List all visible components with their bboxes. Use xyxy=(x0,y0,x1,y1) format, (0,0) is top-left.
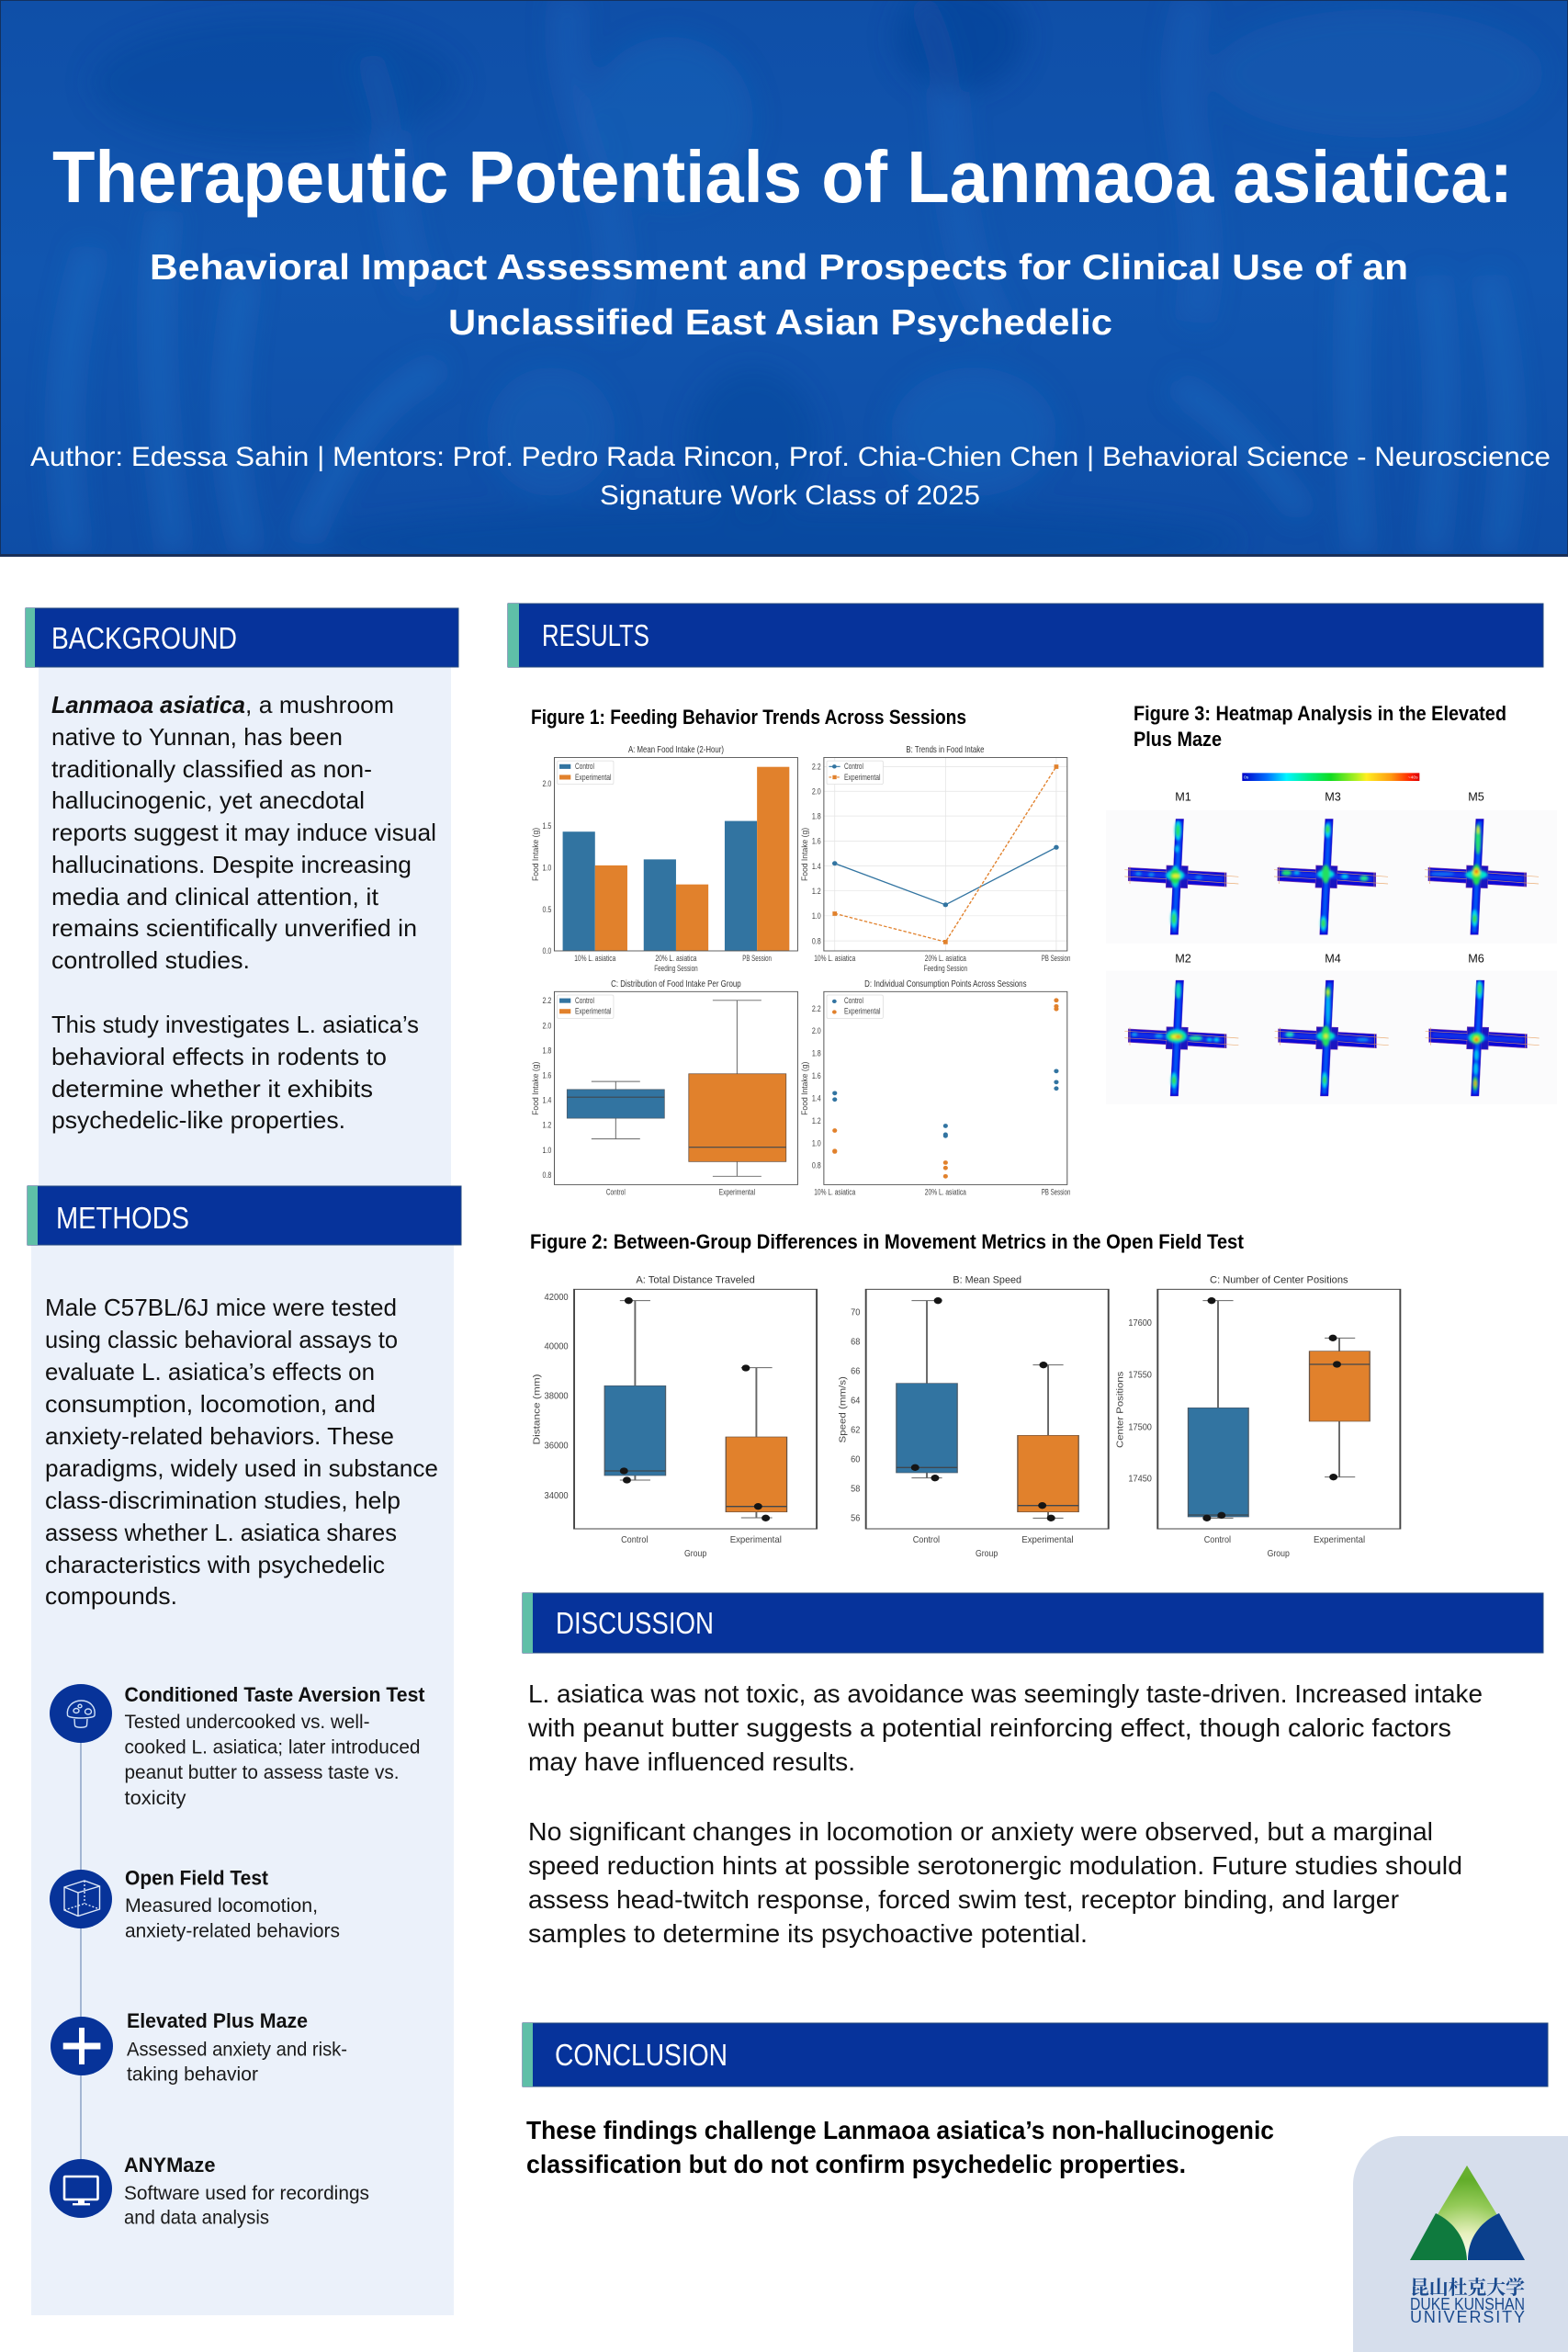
heading: discussion xyxy=(523,1593,1543,1653)
text: methods xyxy=(45,1294,438,1610)
method: open field test: anxiety-related behaviors xyxy=(125,1921,340,1942)
text: methods: evaluate L. asiatica’s effects on xyxy=(45,1358,375,1385)
chart D: individual consumption points: Food Intake (g) xyxy=(800,1062,809,1115)
box plot A: total distance: Control xyxy=(621,1534,648,1545)
chart A: mean food intake: Feeding Session xyxy=(654,964,698,973)
box plot C: center positions: 17600 xyxy=(1128,1317,1152,1329)
chart B: trends in food intake: 1.8 xyxy=(812,812,821,820)
logo: Duke Kunshan University: 昆山杜克大学 xyxy=(1410,2273,1525,2301)
heatmap M1 xyxy=(1124,791,1238,934)
figure 1: feeding charts xyxy=(531,745,1070,1197)
chart D: individual consumption points: 1.4 xyxy=(812,1094,821,1102)
method: conditioned taste aversion: toxicity xyxy=(125,1788,186,1809)
text: conclusion: classification but do not confirm psychedelic properties. xyxy=(526,2150,1186,2178)
text: background: behavioral effects in rodents to xyxy=(51,1043,387,1070)
box plot B: mean speed: 66 xyxy=(851,1366,860,1376)
heading: results xyxy=(508,604,1543,667)
chart B: trends in food intake: 20% L. asiatica xyxy=(925,954,967,963)
chart B: trends in food intake: Control xyxy=(844,763,863,771)
chart A: mean food intake: 20% L. asiatica xyxy=(655,954,697,963)
box plot A: total distance: 40000 xyxy=(545,1341,569,1351)
chart A: mean food intake: Experimental xyxy=(575,773,612,782)
colour scale: ~40s xyxy=(1408,775,1418,781)
text: discussion: with peanut butter suggests a potential reinforcing effect, though caloric factors xyxy=(527,1713,1451,1742)
chart B: trends in food intake: 0.8 xyxy=(812,937,821,945)
header banner xyxy=(0,0,1568,579)
chart D: individual consumption points: 2.2 xyxy=(812,1004,821,1013)
heading: discussion: DISCUSSION xyxy=(556,1606,714,1640)
method: anymaze: ANYMaze xyxy=(124,2154,215,2177)
method: elevated plus maze: Assessed anxiety and risk- xyxy=(127,2040,347,2060)
chart D: individual consumption points: 1.8 xyxy=(812,1049,821,1057)
figure 3: heatmaps xyxy=(1106,773,1557,1104)
chart C: distribution of food intake: 1.0 xyxy=(542,1146,551,1155)
logo: Duke Kunshan University: DUKE KUNSHAN xyxy=(1410,2295,1525,2313)
icon: plus xyxy=(51,2017,113,2075)
method: anymaze: Software used for recordings xyxy=(124,2183,369,2204)
subtitle: Unclassified East Asian Psychedelic xyxy=(448,303,1112,343)
box plot B: mean speed: 60 xyxy=(851,1454,860,1464)
box plot A: total distance: 38000 xyxy=(545,1391,569,1401)
chart A: mean food intake: 0.5 xyxy=(542,905,551,914)
heading: background xyxy=(26,608,458,667)
method: conditioned taste aversion: cooked L. asiatica; later introduced xyxy=(125,1736,421,1758)
heading: methods: METHODS xyxy=(56,1201,189,1235)
box plot B: mean speed: 70 xyxy=(851,1307,860,1317)
chart C: distribution of food intake: Food Intake (g) xyxy=(531,1062,540,1115)
box plot A: total distance: Distance (mm) xyxy=(532,1374,542,1444)
heading: methods xyxy=(28,1186,461,1245)
chart B: trends in food intake: 10% L. asiatica xyxy=(814,954,856,963)
chart B: trends in food intake: Feeding Session xyxy=(924,964,967,973)
method: conditioned taste aversion: peanut butter to assess taste vs. xyxy=(125,1762,399,1783)
panel: background xyxy=(26,608,458,1186)
chart B: trends in food intake: B: Trends in Food Intake xyxy=(906,745,985,755)
box plot B: mean speed: Speed (mm/s) xyxy=(838,1376,848,1442)
text: discussion: No significant changes in locomotion or anxiety were observed, but a marginal xyxy=(528,1817,1433,1846)
chart A: mean food intake: 2.0 xyxy=(542,779,551,788)
author line: Signature Work Class of 2025 xyxy=(600,481,980,511)
chart A: mean food intake: 1.5 xyxy=(542,821,551,831)
method: open field test: Open Field Test xyxy=(125,1867,269,1890)
heatmap M6 xyxy=(1426,952,1540,1096)
figure 3 heading xyxy=(1134,702,1506,751)
chart D: individual consumption points: PB Session xyxy=(1042,1188,1070,1197)
text: methods: compounds. xyxy=(45,1582,177,1610)
text: conclusion xyxy=(526,2116,1274,2178)
heatmap M4: M4 xyxy=(1325,952,1341,965)
box plot A: total distance: Group xyxy=(684,1548,706,1559)
box plot A: total distance: 34000 xyxy=(545,1490,569,1501)
chart B: trends in food intake xyxy=(800,745,1070,973)
box plot C: center positions: Control xyxy=(1204,1534,1231,1545)
heading: conclusion xyxy=(523,2023,1548,2086)
text: discussion: may have influenced results. xyxy=(528,1747,855,1776)
chart C: distribution of food intake xyxy=(531,980,797,1197)
text: methods: paradigms, widely used in substance xyxy=(45,1454,438,1482)
colour scale: 0s xyxy=(1244,775,1249,781)
text: discussion: assess head-twitch response, forced swim test, receptor binding, and larger xyxy=(528,1885,1399,1914)
chart D: individual consumption points: 1.6 xyxy=(812,1071,821,1080)
box plot C: center positions: 17500 xyxy=(1128,1422,1152,1432)
method: conditioned taste aversion: Tested undercooked vs. well- xyxy=(125,1712,369,1733)
text: methods: class-discrimination studies, help xyxy=(45,1487,400,1514)
text: background: media and clinical attention, it xyxy=(51,883,379,910)
chart B: trends in food intake: 1.0 xyxy=(812,911,821,921)
text: background: determine whether it exhibits xyxy=(51,1075,373,1102)
method: anymaze: and data analysis xyxy=(124,2208,269,2229)
heading: conclusion: CONCLUSION xyxy=(555,2038,728,2072)
text: discussion: L. asiatica was not toxic, as avoidance was seemingly taste-driven. Increased intake xyxy=(528,1679,1483,1708)
chart C: distribution of food intake: Control xyxy=(575,996,594,1005)
text: methods: assess whether L. asiatica shares xyxy=(45,1519,397,1546)
box plot A: total distance: 42000 xyxy=(545,1292,569,1303)
heatmap M2 xyxy=(1124,952,1238,1096)
icon: monitor xyxy=(50,2159,112,2218)
heatmap M5 xyxy=(1425,791,1539,934)
heatmap M5: M5 xyxy=(1468,791,1484,804)
chart D: individual consumption points: D: Individual Consumption Points Across Sessions xyxy=(864,980,1027,989)
text: discussion xyxy=(527,1679,1483,1948)
heading: background: BACKGROUND xyxy=(51,621,237,655)
chart D: individual consumption points: 1.2 xyxy=(812,1116,821,1125)
heatmap M3 xyxy=(1274,791,1388,934)
box plot B: mean speed: 58 xyxy=(851,1484,860,1494)
box plot B: mean speed: Experimental xyxy=(1021,1534,1073,1545)
chart D: individual consumption points: 0.8 xyxy=(812,1161,821,1170)
chart B: trends in food intake: 2.2 xyxy=(812,763,821,772)
chart D: individual consumption points: 10% L. asiatica xyxy=(814,1188,856,1197)
chart B: trends in food intake: Food Intake (g) xyxy=(800,828,809,881)
box plot A: total distance: Experimental xyxy=(730,1534,782,1545)
box plot A: total distance: 36000 xyxy=(545,1441,569,1451)
chart A: mean food intake xyxy=(531,745,797,973)
panel: conclusion xyxy=(523,2023,1548,2178)
method: elevated plus maze: taking behavior xyxy=(127,2064,258,2085)
box plot C: center positions: 17450 xyxy=(1128,1474,1152,1484)
figure 2: open field box plots xyxy=(532,1274,1400,1559)
text: methods: using classic behavioral assays to xyxy=(45,1326,398,1353)
icon: cube xyxy=(50,1870,112,1928)
text: background: hallucinations. Despite increasing xyxy=(51,851,412,878)
box plot B: mean speed: Control xyxy=(913,1534,940,1545)
heatmap M1: M1 xyxy=(1175,791,1191,804)
text: background: Lanmaoa asiatica xyxy=(51,691,245,718)
chart B: trends in food intake: Experimental xyxy=(844,773,881,782)
method: open field test xyxy=(50,1867,340,1942)
chart A: mean food intake: 10% L. asiatica xyxy=(574,954,616,963)
chart A: mean food intake: Food Intake (g) xyxy=(531,828,540,881)
text: discussion: speed reduction hints at possible serotonergic modulation. Future studies should xyxy=(528,1851,1462,1880)
box plot C: center positions xyxy=(1115,1274,1400,1559)
text: background xyxy=(51,691,436,1134)
logo: Duke Kunshan University xyxy=(1353,2136,1568,2352)
text: background: psychedelic-like properties. xyxy=(51,1106,345,1134)
chart D: individual consumption points: Control xyxy=(844,996,863,1005)
author line: Author: Edessa Sahin | Mentors: Prof. Pedro Rada Rincon, Prof. Chia-Chien Chen | Behavioral Science - Neuroscience xyxy=(30,442,1551,472)
heading: results: RESULTS xyxy=(542,618,649,652)
figure 3 heading: Plus Maze xyxy=(1134,728,1222,751)
chart A: mean food intake: 1.0 xyxy=(542,864,551,872)
heatmap M3: M3 xyxy=(1325,791,1341,804)
text: conclusion: These findings challenge Lanmaoa asiatica’s non-hallucinogenic xyxy=(526,2116,1274,2144)
logo: Duke Kunshan University: UNIVERSITY xyxy=(1410,2308,1525,2326)
chart D: individual consumption points xyxy=(800,980,1070,1197)
subtitle xyxy=(150,248,1408,343)
box plot C: center positions: Group xyxy=(1268,1548,1290,1559)
panel: methods xyxy=(28,1186,461,2315)
box plot A: total distance xyxy=(532,1274,817,1559)
box plot C: center positions: Center Positions xyxy=(1115,1372,1125,1448)
chart C: distribution of food intake: 2.0 xyxy=(542,1022,551,1030)
heatmap M6: M6 xyxy=(1468,952,1484,965)
figure 3 heading: Figure 3: Heatmap Analysis in the Elevated xyxy=(1134,702,1506,725)
colour scale xyxy=(1242,773,1419,781)
box plot B: mean speed: 62 xyxy=(851,1425,860,1435)
box plot C: center positions: Experimental xyxy=(1314,1534,1365,1545)
title: Therapeutic Potentials of Lanmaoa asiatica: xyxy=(52,136,1513,218)
text: background: , a mushroom xyxy=(245,691,394,718)
chart A: mean food intake: 0.0 xyxy=(542,947,551,956)
text: methods: anxiety-related behaviors. These xyxy=(45,1422,394,1450)
chart A: mean food intake: A: Mean Food Intake (2-Hour) xyxy=(628,745,724,755)
chart D: individual consumption points: 2.0 xyxy=(812,1026,821,1035)
box plot C: center positions: 17550 xyxy=(1128,1370,1152,1380)
subtitle: Behavioral Impact Assessment and Prospects for Clinical Use of an xyxy=(150,248,1408,288)
text: background: reports suggest it may induce visual xyxy=(51,819,436,846)
box plot B: mean speed: Group xyxy=(976,1548,998,1559)
box plot C: center positions: C: Number of Center Positions xyxy=(1210,1274,1348,1285)
chart C: distribution of food intake: 1.4 xyxy=(542,1096,551,1104)
chart B: trends in food intake: 1.2 xyxy=(812,887,821,896)
method: conditioned taste aversion: Conditioned Taste Aversion Test xyxy=(125,1683,425,1706)
chart C: distribution of food intake: 1.6 xyxy=(542,1071,551,1080)
box plot B: mean speed: B: Mean Speed xyxy=(953,1274,1021,1285)
chart B: trends in food intake: 2.0 xyxy=(812,787,821,796)
chart D: individual consumption points: 1.0 xyxy=(812,1139,821,1148)
text: methods: consumption, locomotion, and xyxy=(45,1390,376,1418)
text: discussion: samples to determine its psychoactive potential. xyxy=(528,1919,1088,1948)
chart A: mean food intake: Control xyxy=(575,763,594,771)
chart C: distribution of food intake: C: Distribution of Food Intake Per Group xyxy=(611,980,741,989)
chart C: distribution of food intake: Experimental xyxy=(575,1007,612,1016)
text: background: native to Yunnan, has been xyxy=(51,723,343,751)
text: background: controlled studies. xyxy=(51,946,250,974)
figure 2 heading: Figure 2: Between-Group Differences in Movement Metrics in the Open Field Test xyxy=(530,1230,1245,1253)
icon: mountain mark xyxy=(1410,2165,1525,2260)
text: background: remains scientifically unverified in xyxy=(51,914,417,942)
panel: discussion xyxy=(523,1593,1543,1948)
box plot B: mean speed: 68 xyxy=(851,1337,860,1347)
chart B: trends in food intake: PB Session xyxy=(1042,954,1070,963)
method: anymaze xyxy=(50,2154,369,2229)
chart B: trends in food intake: 1.6 xyxy=(812,837,821,846)
method: elevated plus maze: Elevated Plus Maze xyxy=(127,2009,308,2032)
text: background: traditionally classified as non- xyxy=(51,755,372,783)
box plot A: total distance: A: Total Distance Traveled xyxy=(636,1274,755,1285)
method: conditioned taste aversion xyxy=(50,1683,425,1809)
method: elevated plus maze xyxy=(51,2009,347,2085)
box plot B: mean speed: 56 xyxy=(851,1513,860,1523)
chart C: distribution of food intake: Control xyxy=(606,1188,626,1197)
text: background: This study investigates L. asiatica’s xyxy=(51,1011,419,1038)
box plot B: mean speed: 64 xyxy=(851,1396,861,1406)
chart C: distribution of food intake: 1.2 xyxy=(542,1121,551,1130)
chart C: distribution of food intake: 2.2 xyxy=(542,996,551,1005)
heatmap M2: M2 xyxy=(1175,952,1191,965)
method: open field test: Measured locomotion, xyxy=(125,1895,318,1917)
chart D: individual consumption points: 20% L. asiatica xyxy=(925,1188,967,1197)
chart D: individual consumption points: Experimental xyxy=(844,1007,881,1016)
chart C: distribution of food intake: 1.8 xyxy=(542,1046,551,1055)
chart C: distribution of food intake: 0.8 xyxy=(542,1170,551,1180)
heatmap M4 xyxy=(1275,952,1389,1096)
chart C: distribution of food intake: Experimental xyxy=(719,1188,755,1197)
icon: mushroom xyxy=(50,1684,112,1743)
chart B: trends in food intake: 1.4 xyxy=(812,862,821,871)
author line xyxy=(30,442,1551,511)
chart A: mean food intake: PB Session xyxy=(742,954,772,963)
text: background: hallucinogenic, yet anecdotal xyxy=(51,786,365,814)
text: methods: characteristics with psychedelic xyxy=(45,1551,385,1578)
figure 1 heading: Figure 1: Feeding Behavior Trends Across Sessions xyxy=(531,706,966,729)
box plot B: mean speed xyxy=(838,1274,1109,1559)
text: methods: Male C57BL/6J mice were tested xyxy=(45,1294,397,1321)
